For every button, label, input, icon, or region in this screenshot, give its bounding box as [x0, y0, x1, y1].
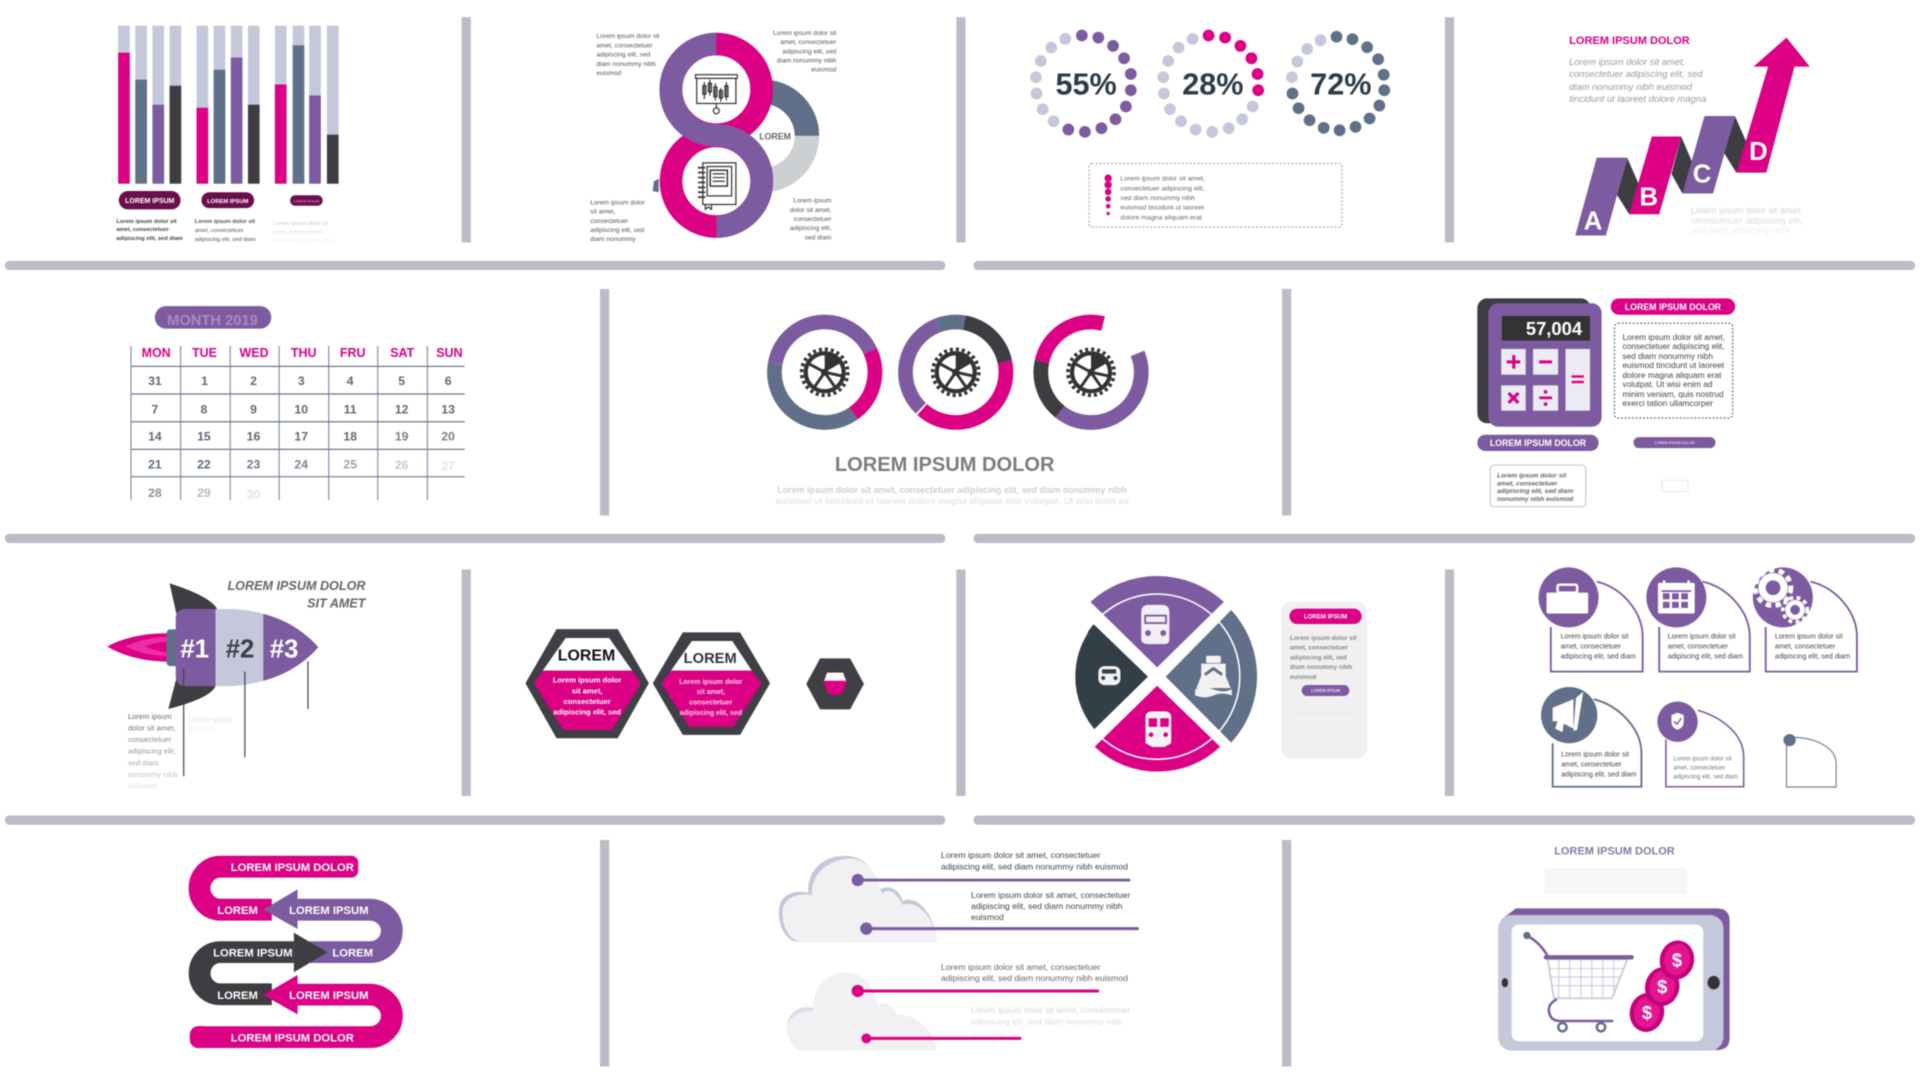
text block: Lorem ipsum	[189, 715, 232, 724]
hexagon 2	[654, 633, 769, 734]
calendar grid: 2	[250, 374, 257, 388]
italic note box: adipiscing elit, sed diam	[1497, 488, 1573, 495]
text block: dolor sit amet,	[128, 723, 176, 732]
pink label: LOREM IPSUM DOLOR	[1625, 302, 1722, 312]
heading: SIT AMET	[307, 596, 367, 610]
panel: shopping tablet	[1498, 845, 1730, 1051]
calendar grid: 5	[398, 374, 405, 388]
side card: Lorem ipsum dolor sit	[1290, 635, 1358, 642]
calendar grid: SUN	[436, 346, 463, 360]
gear ring 3	[1041, 322, 1141, 423]
calendar grid: 29	[197, 486, 211, 500]
callout 2: adipiscing elit, sed diam	[1668, 653, 1743, 661]
calendar grid: 26	[395, 458, 409, 472]
text blocks: Lorem ipsum dolor	[590, 199, 646, 206]
dotted text box	[1614, 323, 1733, 418]
dotted text box: Lorem ipsum dolor sit amet,	[1622, 332, 1725, 342]
text blocks: sed diam	[805, 234, 832, 241]
wedge: dark car	[1075, 624, 1148, 730]
text block	[128, 712, 232, 791]
text blocks: euismod	[971, 1027, 1004, 1037]
calendar grid: 13	[441, 402, 455, 416]
band labels: LOREM	[217, 905, 258, 917]
gear ring 1	[774, 322, 875, 422]
dot ring 55%	[1030, 30, 1137, 138]
dot ring 28%: 28%	[1182, 67, 1243, 101]
captions: amet, consectetuer	[116, 227, 169, 233]
calendar grid: 20	[441, 429, 455, 443]
captions: Lorem ipsum dolor sit	[116, 219, 177, 225]
text blocks	[941, 850, 1130, 1037]
bar chart: third group	[275, 26, 339, 184]
wedge: purple bus	[1090, 576, 1224, 667]
captions: Lorem ipsum dolor sit	[195, 219, 255, 225]
rocket body: #1	[180, 636, 209, 664]
text blocks: Lorem ipsum	[793, 198, 832, 205]
text blocks: sit amet,	[590, 209, 615, 216]
icon: ship	[1195, 656, 1232, 697]
calendar grid: 4	[347, 374, 354, 388]
purple label: LOREM IPSUM DOLOR	[1490, 438, 1587, 448]
leader lines	[184, 661, 308, 776]
italic note box: Lorem ipsum dolor sit	[1497, 473, 1567, 480]
ribbon arrow: C	[1693, 160, 1711, 188]
panel: percentage dot rings	[1030, 30, 1390, 227]
callout 2: amet, consectetuer	[1668, 642, 1729, 650]
pink bottom band with arrow	[190, 975, 392, 1048]
heading: LOREM IPSUM DOLOR	[1554, 845, 1675, 857]
hexagon 1: sit amet,	[572, 686, 603, 695]
dotted text box: sed diam nonummy nibh	[1120, 195, 1195, 202]
icon: presentation board	[696, 75, 737, 114]
month pill	[155, 306, 271, 329]
calendar grid: 21	[148, 458, 162, 472]
text blocks	[590, 30, 837, 243]
calendar grid: MON	[142, 346, 171, 360]
text block: sed diam	[128, 758, 159, 767]
hexagon 2: sit amet,	[697, 689, 725, 696]
text block: diam nonummy nibh euismod	[1569, 81, 1693, 92]
panel: rocket	[107, 579, 367, 791]
ribbon arrow	[1575, 38, 1810, 236]
dotted text box: volutpat. Ut wisi enim ad	[1622, 379, 1713, 389]
calendar grid: SAT	[390, 346, 415, 360]
text block: dolor sit	[189, 724, 216, 733]
calendar grid: 17	[294, 429, 308, 443]
faded text: euismod ut tincidunt ut laoreet dolore magna aliquam erat volutpat. Ut wisi enim ad	[775, 496, 1129, 506]
callout 1	[1539, 567, 1643, 672]
captions: amet, consectetuer	[195, 228, 244, 234]
text blocks: adipiscing elit, sed diam nonummy nibh	[971, 901, 1123, 911]
calendar grid: WED	[240, 346, 269, 360]
dotted text box	[1089, 163, 1342, 227]
dotted text box: dolore magna aliquam erat	[1622, 370, 1722, 380]
rocket nozzle	[167, 629, 179, 666]
side card: euismod	[1290, 674, 1316, 681]
calendar grid: 14	[148, 429, 162, 443]
pill labels: LOREM IPSUM	[125, 198, 175, 205]
band labels: LOREM IPSUM	[289, 990, 368, 1002]
icon: rocket flame	[107, 633, 168, 662]
icon: shopping cart	[1523, 932, 1632, 1031]
text block: adipiscing elit,	[128, 747, 176, 756]
faded text: Lorem ipsum dolor sit amet, consectetuer adipiscing elit, sed diam nonummy nibh	[777, 485, 1127, 495]
callout 2	[1646, 567, 1750, 672]
faded caption: consectetuer adipiscing elit,	[1691, 215, 1802, 225]
icon: dollar coins	[1626, 937, 1698, 1035]
calendar grid: TUE	[192, 346, 217, 360]
callout 5	[1657, 702, 1744, 787]
dot ring 72%: 72%	[1310, 67, 1371, 101]
italic note box: nonummy nibh euismod	[1497, 496, 1574, 503]
calendar grid: FRU	[340, 346, 365, 360]
callout 6	[1783, 734, 1836, 787]
faded text	[775, 485, 1129, 506]
captions	[116, 219, 334, 244]
text blocks: euismod	[811, 67, 837, 74]
side ring	[653, 92, 807, 192]
captions: adipiscing elit, sed diam	[195, 237, 256, 243]
month pill: MONTH 2019	[167, 313, 258, 329]
panel: callout tabs with icons	[1539, 567, 1857, 787]
text block: Lorem ipsum	[128, 712, 172, 721]
rocket fins	[168, 583, 217, 709]
text blocks: Lorem ipsum dolor sit amet, consectetuer	[971, 1005, 1130, 1015]
rocket body	[175, 609, 320, 687]
text blocks: Lorem ipsum dolor sit	[596, 33, 660, 40]
text blocks: adipiscing elit, sed	[590, 227, 645, 234]
heading: LOREM IPSUM DOLOR	[227, 579, 366, 593]
text block: Lorem ipsum dolor sit amet,	[1569, 56, 1685, 67]
panel: serpentine arrows	[190, 856, 392, 1048]
pink label	[1611, 298, 1735, 315]
calendar grid: 31	[148, 374, 162, 388]
panel: calculator	[1477, 298, 1735, 507]
text blocks: diam nonummy nibh	[596, 61, 656, 68]
text blocks: Lorem ipsum dolor sit amet, consectetuer	[941, 962, 1100, 972]
hexagon 1: adipiscing elit, sed	[553, 708, 621, 717]
callout 3: amet, consectetuer	[1775, 642, 1836, 650]
text blocks: adipiscing elit, sed diam nonummy nibh euismod	[941, 973, 1128, 983]
hexagon 2: LOREM	[684, 651, 737, 667]
pink top band	[200, 856, 358, 910]
calendar grid: 28	[148, 486, 162, 500]
bar chart: second group	[197, 26, 260, 184]
panel: clouds with lines	[779, 850, 1139, 1051]
calendar grid: 11	[344, 402, 357, 416]
calendar grid: 19	[395, 429, 409, 443]
italic note box: amet, consectetuer	[1497, 481, 1558, 488]
dotted text box: euismod tincidunt ut laoreet	[1120, 205, 1204, 212]
panel: figure-eight rings	[590, 30, 837, 243]
captions: adipiscing elit, sed diam	[273, 238, 334, 244]
calendar grid: 22	[197, 458, 211, 472]
icon: bus	[1141, 605, 1169, 644]
icon: dollar coins: $	[1657, 976, 1667, 997]
icon: notebook	[698, 163, 736, 209]
dotted text box: exerci tation ullamcorper	[1622, 398, 1713, 408]
side ring: LOREM	[759, 132, 791, 142]
hexagon 1: consectetuer	[564, 697, 611, 706]
callout 4	[1541, 687, 1641, 787]
panel: calendar	[131, 306, 465, 501]
callout 4: Lorem ipsum dolor sit	[1561, 750, 1629, 758]
callout 4: amet, consectetuer	[1561, 760, 1622, 768]
text block: consectetuer adipiscing elit, sed	[1569, 68, 1703, 79]
text blocks: diam nonummy	[590, 236, 636, 243]
band labels: LOREM IPSUM	[213, 947, 293, 959]
band labels: LOREM IPSUM	[289, 905, 368, 917]
text block: euismod	[128, 782, 157, 791]
purple band with arrow	[263, 889, 392, 952]
dotted text box: euismod tincidunt ut laoreet	[1622, 360, 1725, 370]
ribbon arrow: D	[1749, 138, 1768, 166]
calendar grid: 16	[247, 429, 260, 443]
icon: train	[1146, 711, 1171, 747]
text block	[1569, 56, 1706, 104]
dotted text box: sed diam nonummy nibh	[1622, 351, 1713, 361]
dotted text box: consectetuer adipiscing elit,	[1622, 341, 1725, 351]
heading: LOREM IPSUM DOLOR	[835, 454, 1055, 476]
callout 3: adipiscing elit, sed diam	[1775, 653, 1850, 661]
side card: LOREM IPSUM	[1304, 613, 1347, 620]
calendar grid: 3	[298, 374, 305, 388]
band labels: LOREM IPSUM DOLOR	[231, 862, 354, 874]
calendar grid: 27	[441, 459, 455, 473]
wedge: slate ship	[1166, 610, 1257, 743]
callout 1: Lorem ipsum dolor sit	[1561, 633, 1628, 641]
faded placeholder	[1545, 868, 1687, 894]
text block: nonummy nibh	[128, 770, 178, 779]
small purple label	[1633, 437, 1716, 448]
band labels: LOREM	[217, 990, 258, 1002]
callout 2: Lorem ipsum dolor sit	[1668, 633, 1736, 641]
hexagon 2: Lorem ipsum dolor	[679, 679, 743, 686]
calendar grid	[131, 346, 465, 501]
side card: diam nonummy nibh	[1290, 664, 1352, 671]
text blocks: adipiscing elit, sed	[782, 48, 837, 55]
text blocks: adipiscing elit, sed	[596, 52, 651, 59]
heading	[227, 579, 367, 610]
faded caption: sed diam nonummy nibh	[1691, 225, 1790, 235]
captions: Lorem ipsum dolor sit	[273, 221, 328, 227]
gear ring 2	[905, 322, 1006, 422]
connector lines	[852, 874, 1139, 1043]
callout 5: Lorem ipsum dolor sit	[1673, 755, 1732, 762]
callout 3: Lorem ipsum dolor sit	[1775, 633, 1843, 641]
text blocks: Lorem ipsum dolor sit amet, consectetuer	[971, 890, 1130, 900]
side card: adipiscing elit, sed	[1290, 655, 1347, 662]
icon: dollar coins: $	[1642, 1002, 1652, 1023]
panel: rising ribbon arrow	[1569, 35, 1810, 236]
calendar grid: 8	[200, 402, 207, 416]
panel: transport wheel	[1074, 576, 1367, 772]
captions: adipiscing elit, sed diam	[116, 236, 183, 242]
icon: calculator	[1477, 298, 1602, 427]
heading: LOREM IPSUM DOLOR	[1569, 35, 1690, 47]
callout 5: adipiscing elit, sed diam	[1673, 773, 1738, 780]
side card: amet, consectetuer	[1290, 644, 1348, 651]
panel: hexagons	[527, 630, 863, 737]
faded caption: Lorem ipsum dolor sit amet,	[1691, 206, 1803, 216]
pill labels	[119, 191, 323, 209]
band labels: LOREM	[332, 947, 373, 959]
calendar grid: 10	[294, 402, 308, 416]
dark band with arrow	[200, 933, 328, 994]
pill labels: LOREM IPSUM	[293, 199, 319, 203]
pill labels: LOREM IPSUM	[207, 199, 249, 205]
calendar grid: 24	[294, 458, 308, 472]
dotted text box: dolore magna aliquam erat	[1120, 215, 1202, 222]
calendar grid: 18	[343, 429, 357, 443]
text blocks: euismod	[971, 912, 1004, 922]
callout 4: adipiscing elit, sed diam	[1561, 770, 1637, 778]
text blocks: consectetuer	[794, 216, 832, 223]
band labels: LOREM IPSUM DOLOR	[231, 1032, 354, 1044]
small purple label: LOREM IPSUM DOLOR	[1654, 441, 1695, 445]
icon: lower cloud	[787, 972, 937, 1051]
rocket body: #2	[226, 636, 254, 664]
text blocks: Lorem ipsum dolor sit amet, consectetuer	[941, 850, 1100, 860]
dotted text box: minim veniam, quis nostrud	[1622, 389, 1724, 399]
faded caption	[1691, 206, 1803, 235]
text blocks: euismod	[596, 70, 622, 77]
hexagon 3	[807, 659, 863, 709]
rocket body: #3	[270, 636, 298, 664]
wedge: pink train	[1095, 686, 1220, 772]
hexagon 1: LOREM	[558, 647, 615, 664]
calendar grid: 25	[343, 458, 357, 472]
calendar grid: 9	[250, 402, 257, 416]
dotted text box: Lorem ipsum dolor sit amet,	[1120, 176, 1205, 183]
hexagon 2: adipiscing elit, sed	[680, 710, 742, 717]
calendar grid: 12	[395, 402, 409, 416]
band labels	[213, 862, 373, 1044]
bar chart: first group	[118, 26, 181, 184]
calendar grid: 30	[247, 487, 260, 501]
panel: gear rings	[774, 322, 1141, 506]
ribbon arrow: B	[1639, 184, 1658, 212]
hexagon 2: consectetuer	[689, 699, 733, 706]
purple label	[1477, 435, 1599, 451]
dot ring 55%: 55%	[1055, 67, 1117, 101]
calendar grid: THU	[291, 346, 316, 360]
dot ring 72%	[1286, 31, 1390, 136]
text blocks: adipiscing elit, sed diam nonummy nibh euismod	[941, 861, 1128, 871]
icon: dollar coins: $	[1672, 949, 1682, 970]
calendar grid: 1	[201, 374, 208, 388]
text blocks: amet, consectetuer	[780, 39, 837, 46]
text blocks: amet, consectetuer	[596, 42, 653, 49]
hexagon 1: Lorem ipsum dolor	[553, 675, 622, 684]
text blocks: dolor sit amet,	[790, 207, 832, 214]
callout 3	[1753, 567, 1857, 672]
icon: calculator: 57,004	[1526, 318, 1583, 339]
text blocks: adipiscing elit, sed diam nonummy nibh	[971, 1016, 1123, 1026]
calendar grid: 6	[445, 374, 452, 388]
text block: tincidunt ut laoreet dolore magna	[1569, 93, 1706, 104]
dotted text box: consectetuer adipiscing elit,	[1120, 185, 1205, 192]
callout 1: adipiscing elit, sed diam	[1561, 653, 1636, 661]
callout 5: amet, consectetuer	[1673, 764, 1725, 771]
empty box	[1662, 480, 1688, 492]
callout 1: amet, consectetuer	[1561, 642, 1622, 650]
icon: car	[1098, 666, 1120, 685]
text blocks: consectetuer	[590, 218, 629, 225]
dot ring 28%	[1157, 30, 1264, 138]
calendar grid: 7	[151, 402, 158, 416]
text block: consectetuer	[128, 735, 172, 744]
side card	[1281, 602, 1367, 758]
side card: LOREM IPSUM	[1311, 688, 1341, 693]
icon: upper cloud	[779, 856, 937, 942]
ribbon arrow: A	[1584, 208, 1602, 236]
panel: stacked bar chart	[116, 26, 339, 244]
calendar grid: 15	[197, 429, 211, 443]
main rings	[671, 44, 762, 227]
text blocks: adipiscing elit,	[790, 225, 832, 232]
tablet	[1498, 908, 1730, 1051]
text blocks: Lorem ipsum dolor sit	[773, 30, 836, 37]
italic note box	[1490, 465, 1586, 507]
text blocks: diam nonummy nibh	[777, 57, 837, 64]
hexagon 1	[527, 630, 648, 737]
captions: amet, consectetuer	[273, 229, 322, 235]
calendar grid: 23	[247, 458, 260, 472]
